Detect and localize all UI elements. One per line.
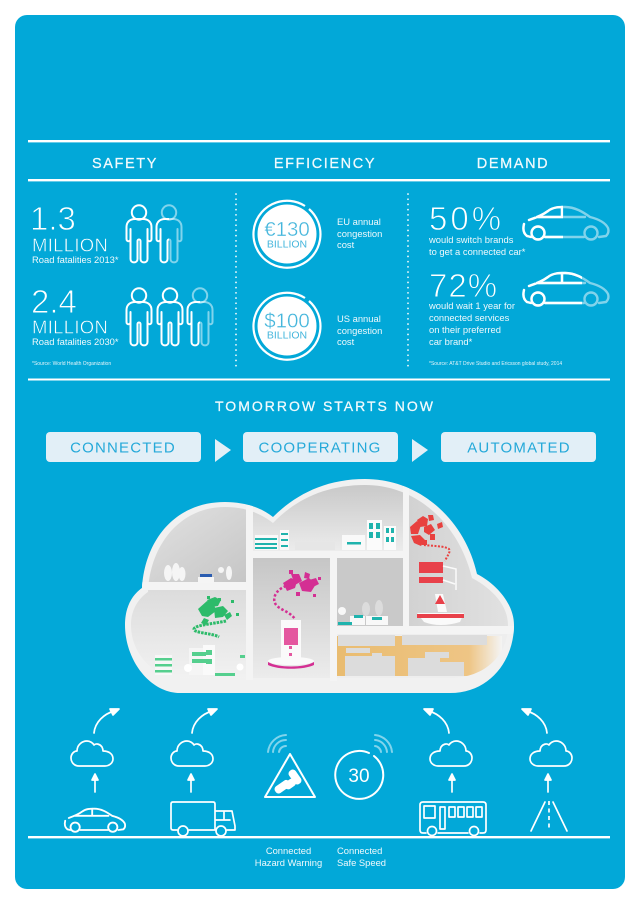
- badge: 130 billion: [253, 201, 320, 268]
- text: US cost: congestion: [337, 325, 382, 336]
- panel: efficiency: [253, 201, 382, 360]
- teal cars: [338, 600, 388, 625]
- label: safe speed: Safe Speed: [337, 857, 386, 868]
- magenta phone tower: [268, 620, 314, 669]
- stat: 72 percent: connected services: [429, 312, 510, 323]
- green data swirl: [194, 596, 239, 637]
- stat: 50 percent: [428, 200, 526, 257]
- teal buildings: [255, 520, 396, 550]
- step: cooperating: COOPERATING: [259, 440, 381, 456]
- stat: 72 percent: on their preferred: [429, 324, 501, 335]
- warning triangle: [265, 754, 315, 797]
- servers floor: [338, 635, 487, 676]
- stat: 1.3 million: Road fatalities 2013*: [32, 254, 119, 265]
- badge: 100 billion: [253, 293, 320, 360]
- icon: road: [531, 801, 567, 831]
- arrow up: [545, 774, 551, 792]
- wifi arcs: [375, 735, 392, 752]
- stat: 50 percent: 50%: [429, 200, 504, 237]
- stat: 1.3 million: [30, 200, 119, 265]
- stat: 2.4 million: MILLION: [32, 316, 108, 338]
- column dividers: [236, 194, 408, 369]
- step: connected: CONNECTED: [70, 440, 176, 456]
- icon: cloud: [430, 741, 472, 766]
- crashed cars: [273, 768, 303, 795]
- header rules: [28, 140, 610, 380]
- step: cooperating: [243, 432, 398, 462]
- stat: 72 percent: 72%: [429, 267, 498, 304]
- badge: 130 billion: €130: [264, 218, 310, 241]
- arrow up: [92, 774, 98, 792]
- arrow curved: [522, 709, 547, 733]
- step: automated: AUTOMATED: [467, 440, 571, 456]
- label: hazard warning: Connected: [266, 845, 311, 856]
- stat: 2.4 million: Road fatalities 2030*: [32, 336, 119, 347]
- source note: *Source: World Health Organization: [32, 361, 111, 367]
- icon group: truck to cloud: [171, 709, 235, 836]
- label: hazard warning: Hazard Warning: [255, 857, 322, 868]
- icon: bus: [420, 802, 486, 836]
- cloud shell: [125, 479, 514, 693]
- label: safe speed: Connected: [337, 845, 382, 856]
- text: EU cost: congestion: [337, 228, 382, 239]
- arrow curved: [94, 709, 119, 733]
- icon: truck: [171, 802, 235, 836]
- stat: 72 percent: car brand*: [429, 336, 473, 347]
- icon: speed limit 30: [335, 735, 392, 799]
- stat: 50 percent: would switch brands: [428, 234, 514, 245]
- wifi arcs: [268, 735, 286, 752]
- arrow up: [188, 774, 194, 792]
- step: connected: [46, 432, 201, 462]
- stat: 72 percent: [428, 267, 515, 347]
- source note: *Source: AT&T Drive Studio and Ericsson global study, 2014: [429, 361, 562, 367]
- icon group: bus to cloud: [420, 709, 486, 836]
- arrow: [412, 439, 428, 462]
- text: US cost: US annual: [337, 313, 381, 324]
- green buildings: [155, 645, 245, 676]
- icon: car mostly filled: [523, 273, 608, 306]
- icon: people 2013: [126, 205, 182, 262]
- heading: efficiency: EFFICIENCY: [274, 156, 376, 172]
- icon: cloud: [71, 741, 113, 766]
- step: automated: [441, 432, 596, 462]
- text: EU cost: cost: [337, 239, 355, 250]
- icon: cloud: [530, 741, 572, 766]
- heading: tomorrow starts now: TOMORROW STARTS NOW: [215, 398, 435, 414]
- heading: safety: SAFETY: [92, 156, 158, 172]
- speed ring: [335, 751, 383, 799]
- icon: car half: [523, 207, 608, 240]
- text: US cost: cost: [337, 336, 355, 347]
- speed number: 30: [348, 766, 370, 787]
- heading: demand: DEMAND: [477, 156, 549, 172]
- icon group: car to cloud: [65, 709, 125, 832]
- cloud cells: [125, 480, 514, 680]
- red sign and boat: [417, 562, 464, 625]
- arrow curved: [192, 709, 217, 733]
- icon: hazard warning: [265, 735, 315, 797]
- arrow curved: [424, 709, 449, 733]
- stat: 2.4 million: 2.4: [31, 283, 77, 320]
- grey town, top-left shelf: [164, 563, 232, 583]
- cloud city illustration: [125, 479, 514, 693]
- stat: 72 percent: would wait 1 year for: [428, 300, 515, 311]
- arrow: [215, 439, 231, 462]
- cloud shelves: [140, 486, 514, 634]
- panel: demand: [428, 200, 608, 367]
- stat: 1.3 million: 1.3: [30, 200, 76, 237]
- stat: 50 percent: to get a connected car*: [429, 246, 526, 257]
- badge: 100 billion: $100: [264, 310, 310, 332]
- badge: 100 billion: BILLION: [267, 330, 307, 342]
- icon: people 2030: [126, 288, 212, 345]
- red data swirl: [410, 515, 450, 561]
- steps row: [46, 432, 596, 462]
- stat: 2.4 million: [31, 283, 119, 347]
- icon: cloud: [171, 741, 213, 766]
- text: EU cost: EU annual: [337, 216, 381, 227]
- panel: safety: [30, 200, 212, 367]
- arrow up: [449, 774, 455, 792]
- stat: 1.3 million: MILLION: [32, 234, 108, 256]
- magenta data swirl: [274, 570, 321, 619]
- icon group: road to cloud: [522, 709, 572, 831]
- icon: car: [65, 809, 125, 832]
- badge: 130 billion: BILLION: [267, 238, 307, 250]
- road line: [28, 836, 610, 838]
